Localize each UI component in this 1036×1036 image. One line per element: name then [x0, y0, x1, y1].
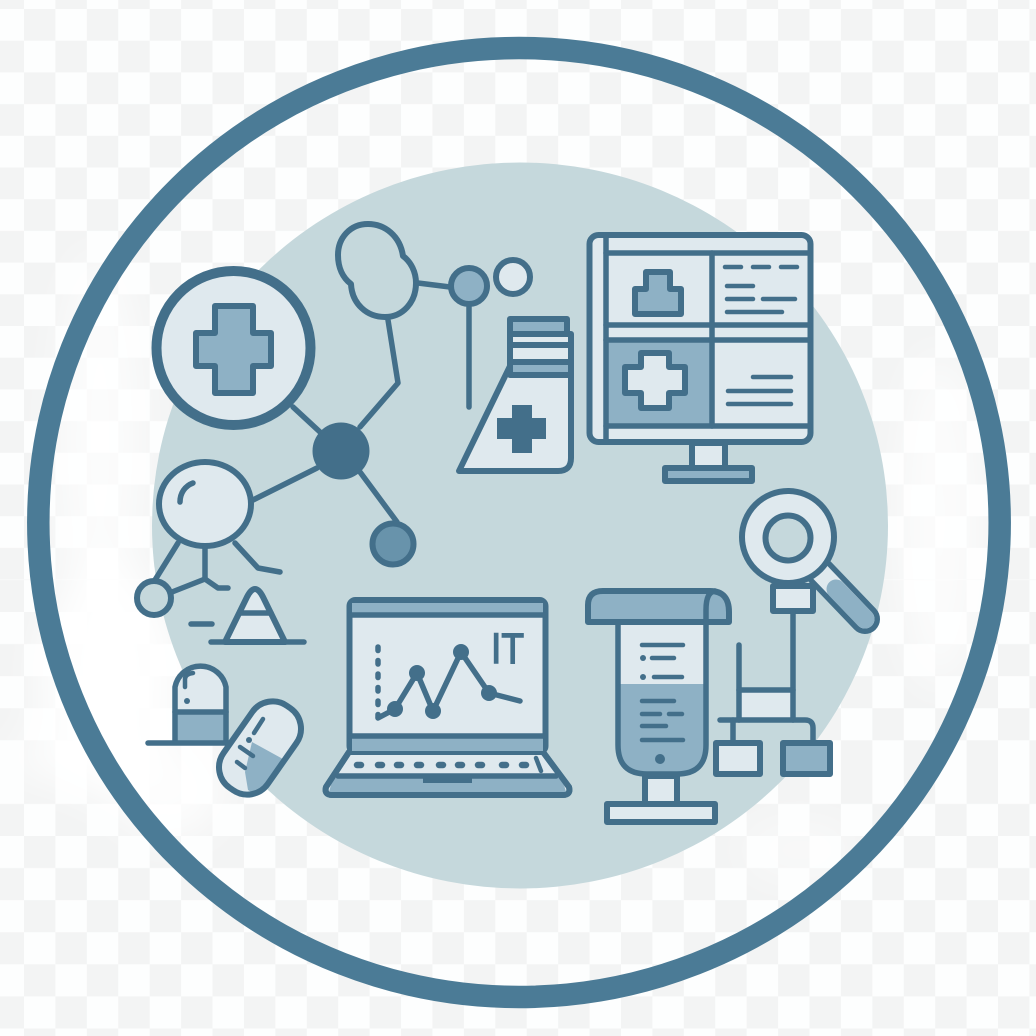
small light node [496, 260, 530, 294]
icon: test tube scroll [588, 591, 729, 822]
laptop screen [350, 600, 546, 752]
icon: laptop with chart [326, 600, 569, 795]
bottle cross [497, 405, 546, 453]
monitor frame [590, 235, 810, 442]
tube text lines [642, 645, 683, 740]
small left node [137, 581, 171, 615]
top panel text lines [725, 267, 797, 312]
central disc [152, 162, 888, 888]
central hub node [312, 422, 370, 480]
bottom panel cross [625, 353, 685, 408]
handle [820, 572, 865, 619]
medical cross circle [156, 271, 310, 425]
IT label: IT [491, 625, 524, 673]
lens centre [766, 516, 810, 560]
large light node [159, 462, 251, 546]
scroll top bar [588, 591, 729, 622]
icon: capsule upright [148, 666, 234, 743]
icon: desktop monitor [590, 235, 810, 481]
tube stand [607, 776, 715, 822]
monitor stand [665, 443, 752, 481]
icon: magnifying glass [742, 491, 865, 619]
laptop keys [357, 762, 526, 768]
palm rest [329, 778, 566, 792]
branching legs [155, 543, 280, 592]
icon: medicine bottle [459, 319, 571, 471]
trackpad notch [423, 775, 472, 783]
keyboard deck [326, 752, 569, 795]
small blue node [451, 268, 487, 304]
icon: molecule network [137, 224, 530, 615]
line chart [378, 644, 520, 719]
blue panel [607, 341, 711, 426]
tube body [618, 622, 706, 774]
lens ring [742, 491, 834, 583]
top panel cross [635, 272, 681, 314]
chart axis [375, 647, 381, 717]
connector lines [253, 283, 469, 522]
flowchart diagram [716, 586, 830, 774]
bottom node [372, 524, 414, 564]
background: soft white patches inside ring [0, 250, 982, 880]
tube liquid [619, 684, 705, 773]
lobed node [338, 224, 416, 317]
icon: cone with base line [191, 589, 304, 642]
bottom panel text lines [728, 377, 791, 404]
icon: tilted pill [216, 698, 304, 798]
